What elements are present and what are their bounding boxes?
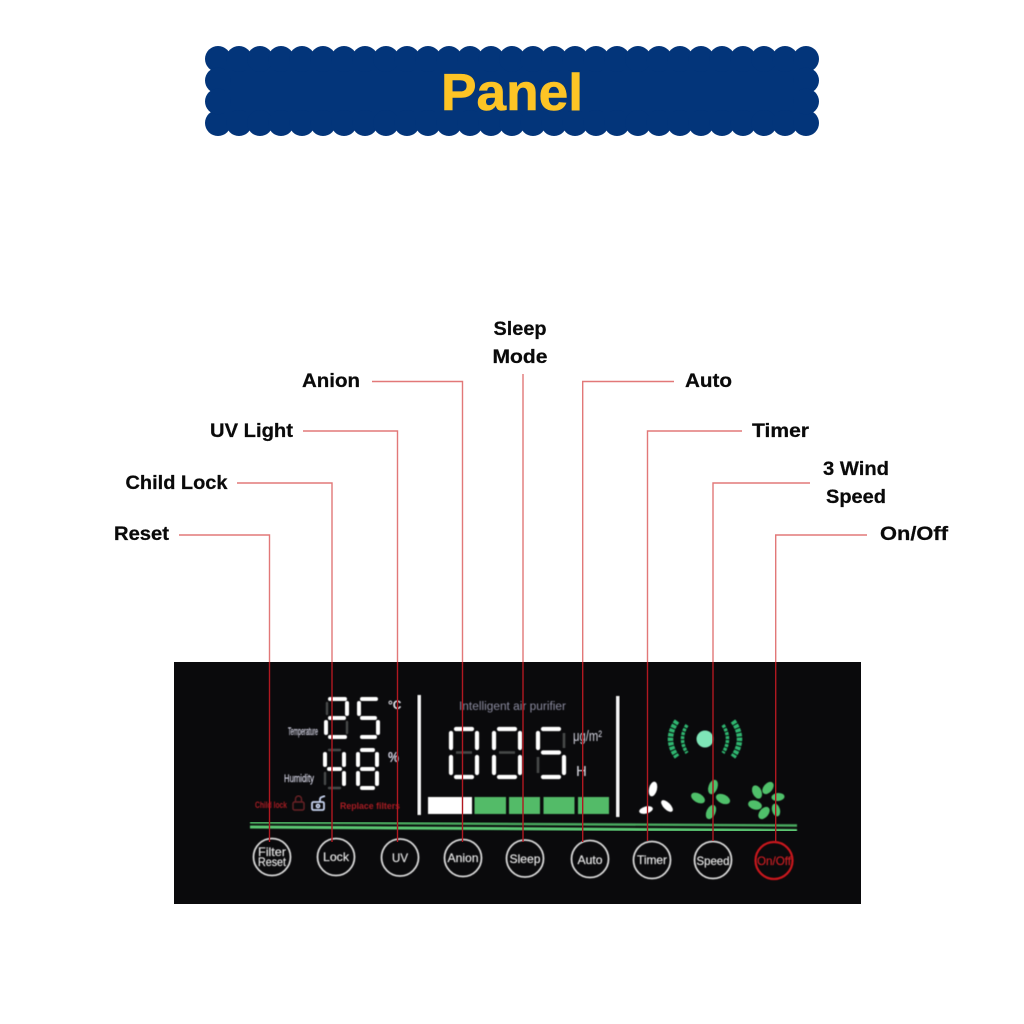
callout: auto: Auto: [685, 370, 732, 392]
callout: UV light: UV Light: [210, 420, 294, 442]
callout: reset: Reset: [114, 523, 170, 545]
panel background: [174, 662, 861, 904]
left divider: [418, 695, 421, 815]
title banner: [205, 46, 819, 136]
dim digit segments: [325, 703, 347, 788]
button: lock: [318, 838, 354, 876]
replace filters text: Replace filters: [340, 801, 400, 811]
callout: child lock: Child Lock: [126, 472, 228, 494]
callout: sleep mode: [492, 318, 548, 842]
icon: medium speed fan: [689, 778, 732, 821]
icon: open lock: [312, 796, 325, 810]
callout: auto: [583, 370, 732, 842]
button: anion: Anion: [448, 851, 478, 865]
temperature and humidity display: [284, 698, 402, 788]
button: UV: [382, 839, 418, 876]
button: speed: Speed: [696, 854, 730, 868]
right divider: [616, 696, 620, 817]
button: filter reset: Reset: [258, 855, 287, 869]
button: filter reset: [254, 838, 290, 876]
wind indicator icon: [670, 721, 740, 757]
status row: child lock and replace filters: [255, 796, 400, 811]
callout: on/off: On/Off: [880, 523, 949, 545]
callout: sleep mode: Mode: [492, 346, 548, 368]
banner title text: Panel: [441, 64, 583, 122]
hours unit: H: [576, 763, 587, 780]
callout: reset: [114, 523, 270, 842]
callout: anion: [302, 370, 462, 842]
air quality display: [451, 701, 602, 780]
humidity label: Humidity: [284, 773, 314, 785]
callout: sleep mode: Sleep: [494, 318, 547, 340]
control panel photo: [174, 662, 861, 904]
callout: 3 wind speed: Speed: [826, 486, 886, 508]
button: sleep: Sleep: [510, 852, 541, 866]
button: on/off: On/Off: [757, 854, 792, 868]
dim digit segments: [456, 733, 564, 773]
button: speed: [694, 842, 732, 878]
green separator lines: [250, 822, 797, 830]
button: filter reset: Filter: [258, 845, 286, 859]
callout: 3 wind speed: [713, 458, 889, 841]
button: auto: Auto: [578, 853, 603, 867]
callout: timer: Timer: [752, 420, 809, 442]
button: auto: [572, 840, 608, 878]
button: UV: UV: [392, 851, 408, 865]
icon: high speed fan: [747, 780, 785, 821]
button: on/off: [756, 842, 792, 879]
microgram unit: μg/m²: [573, 728, 602, 745]
button: lock: Lock: [323, 850, 350, 864]
intelligent air purifier caption: Intelligent air purifier: [459, 701, 566, 713]
banner scalloped background: [205, 46, 819, 136]
touch buttons: [254, 838, 792, 879]
callout: child lock: [126, 472, 332, 842]
button: timer: [634, 842, 670, 878]
callout: 3 wind speed: 3 Wind: [823, 458, 889, 480]
air quality digits 006: [451, 729, 564, 777]
button: timer: Timer: [637, 853, 667, 867]
air quality level bars: [428, 797, 609, 814]
icon: low speed fan: [638, 781, 675, 815]
callout: UV light: [210, 420, 398, 842]
icon: closed lock: [293, 796, 304, 810]
callout: on/off: [776, 523, 949, 842]
button: sleep: [506, 840, 544, 877]
callout: anion: Anion: [302, 370, 360, 392]
humidity digits 48: [325, 750, 377, 788]
temperature and humidity display: Temperature: [288, 726, 318, 738]
callout: timer: [648, 420, 809, 841]
temperature digits 25: [326, 699, 378, 737]
child lock text: Child lock: [255, 800, 288, 810]
degrees celsius unit: °C: [388, 698, 402, 712]
percent unit: %: [388, 749, 399, 766]
button: anion: [444, 840, 482, 876]
